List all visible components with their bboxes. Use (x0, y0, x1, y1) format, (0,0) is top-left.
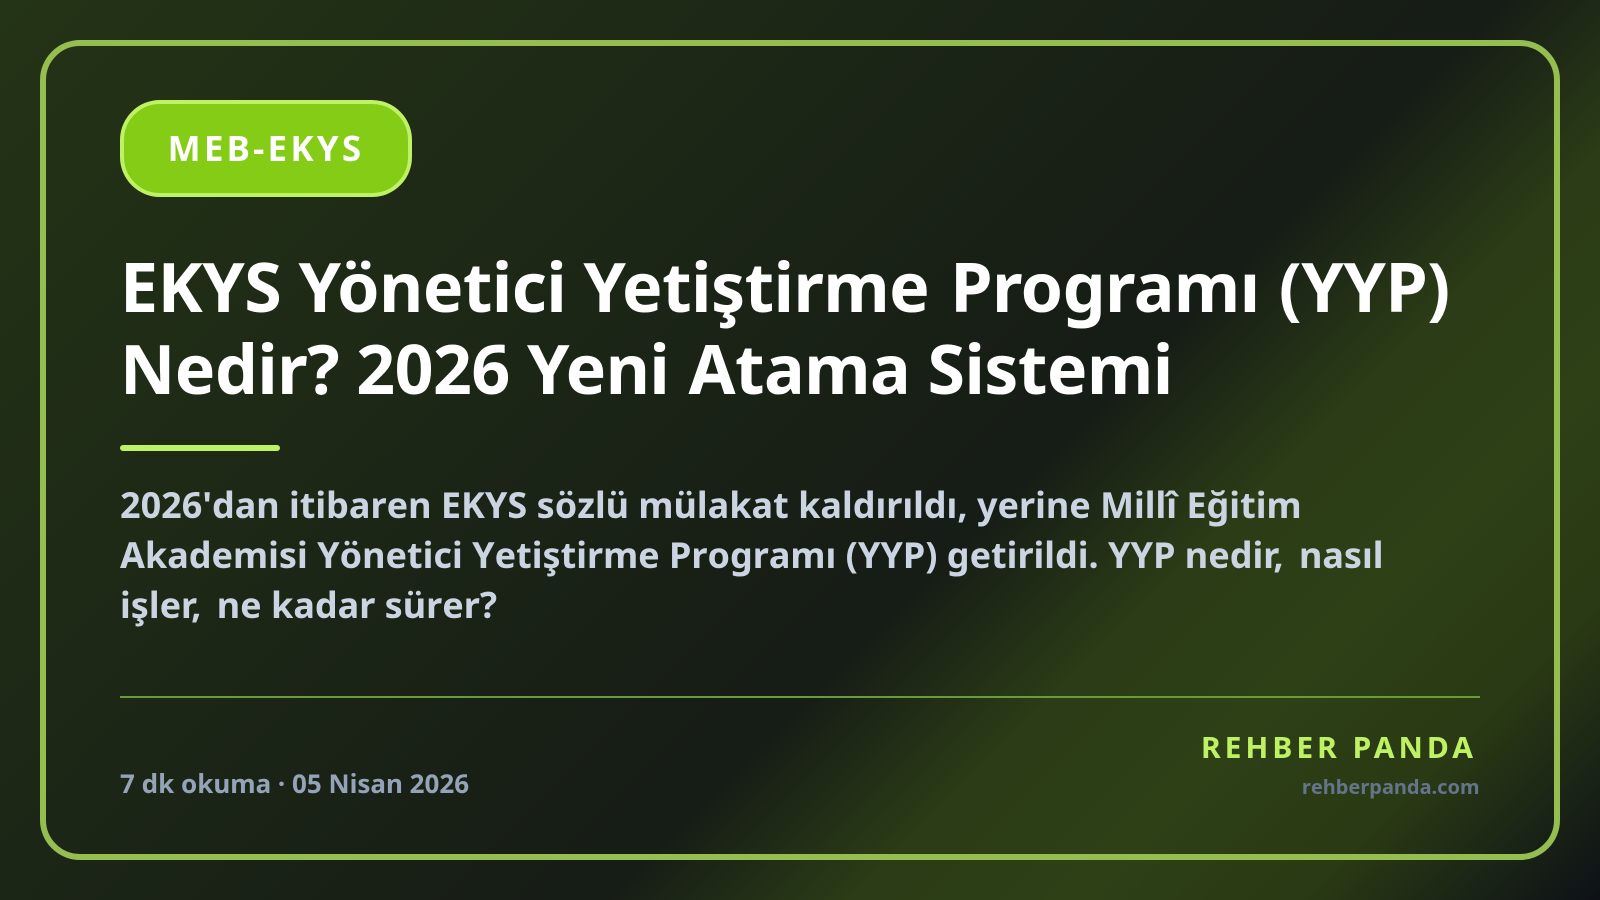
brand name: REHBER PANDA (1201, 726, 1477, 767)
title: Nedir? 2026 Yeni Atama Sistemi (120, 321, 1173, 414)
reading time and date: 7 dk okuma · 05 Nisan 2026 (120, 765, 469, 801)
website: rehberpanda.com (1302, 773, 1480, 800)
category badge: MEB-EKYS: MEB-EKYS (168, 125, 364, 172)
category badge: MEB-EKYS (120, 100, 412, 197)
description text: işler, ne kadar sürer? (120, 580, 497, 629)
description text: Akademisi Yönetici Yetiştirme Programı (YYP) getirildi. YYP nedir, nasıl (120, 530, 1383, 579)
description text: 2026'dan itibaren EKYS sözlü mülakat kaldırıldı, yerine Millî Eğitim (120, 480, 1302, 529)
description text (120, 480, 1383, 629)
title: EKYS Yönetici Yetiştirme Programı (YYP) (120, 239, 1450, 332)
title (120, 239, 1450, 414)
accent bar (120, 445, 280, 451)
